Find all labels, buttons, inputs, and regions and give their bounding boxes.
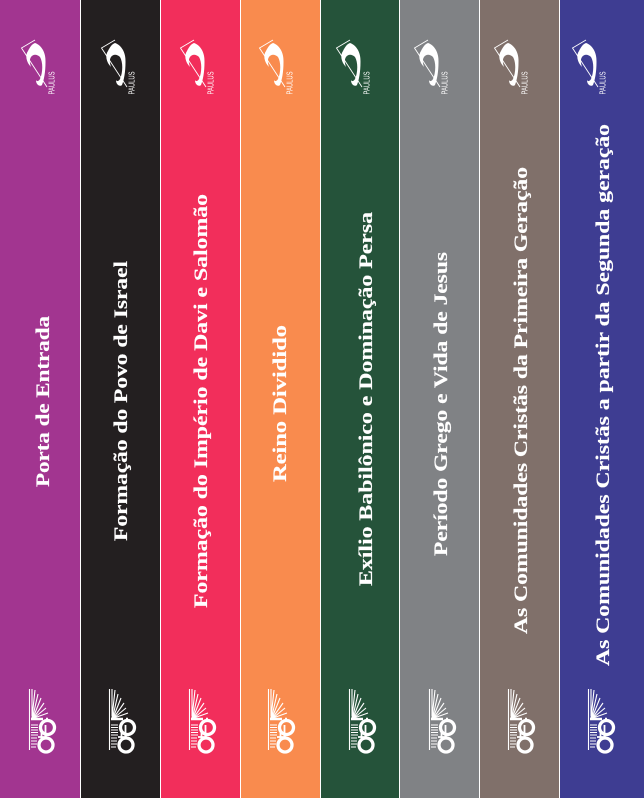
icon: CEBI logo [30, 689, 54, 752]
icon: Paulus logo: PAULUS [362, 72, 372, 94]
panel: Formação do Povo de Israel [81, 0, 160, 798]
spine title: Reino Dividido [270, 325, 291, 482]
panel: Formação do Império de Davi e Salomão [161, 0, 240, 798]
icon: CEBI logo [268, 689, 294, 752]
icon: Paulus logo: PAULUS [440, 72, 450, 94]
icon: Paulus logo: PAULUS [520, 72, 530, 94]
spine title: Período Grego e Vida de Jesus [431, 252, 452, 556]
icon: Paulus logo [414, 40, 450, 94]
icon: Paulus logo: PAULUS [48, 72, 56, 94]
spine title: Formação do Povo de Israel [111, 261, 132, 541]
icon: Paulus logo: PAULUS [598, 72, 608, 94]
icon: Paulus logo: PAULUS [128, 72, 136, 94]
icon: CEBI logo [508, 689, 534, 752]
spine title: Porta de Entrada [33, 315, 54, 487]
icon: CEBI logo [190, 689, 214, 752]
icon: Paulus logo [180, 40, 216, 94]
icon: CEBI logo [588, 689, 614, 752]
icon: Paulus logo: PAULUS [286, 72, 294, 94]
spine title: As Comunidades Cristãs a partir da Segunda geração [593, 124, 614, 666]
panel: As Comunidades Cristãs da Primeira Geração [480, 0, 559, 798]
icon: CEBI logo [110, 689, 134, 752]
icon: Paulus logo [22, 40, 56, 94]
panel: As Comunidades Cristãs a partir da Segunda geração [560, 0, 644, 798]
icon: CEBI logo [350, 689, 374, 752]
icon: Paulus logo [102, 40, 136, 94]
panel: Exílio Babilônico e Dominação Persa [321, 0, 399, 798]
panel: Período Grego e Vida de Jesus [400, 0, 479, 798]
icon: Paulus logo [260, 40, 294, 94]
icon: Paulus logo [494, 40, 530, 94]
spine title: Formação do Império de Davi e Salomão [191, 194, 212, 608]
icon: Paulus logo [336, 40, 372, 94]
icon: Paulus logo [572, 40, 608, 94]
panel: Porta de Entrada [0, 0, 80, 798]
spine title: As Comunidades Cristãs da Primeira Geração [511, 167, 532, 634]
icon: CEBI logo [430, 689, 454, 752]
icon: Paulus logo: PAULUS [206, 72, 216, 94]
panel: Reino Dividido [241, 0, 320, 798]
spine title: Exílio Babilônico e Dominação Persa [356, 211, 377, 586]
